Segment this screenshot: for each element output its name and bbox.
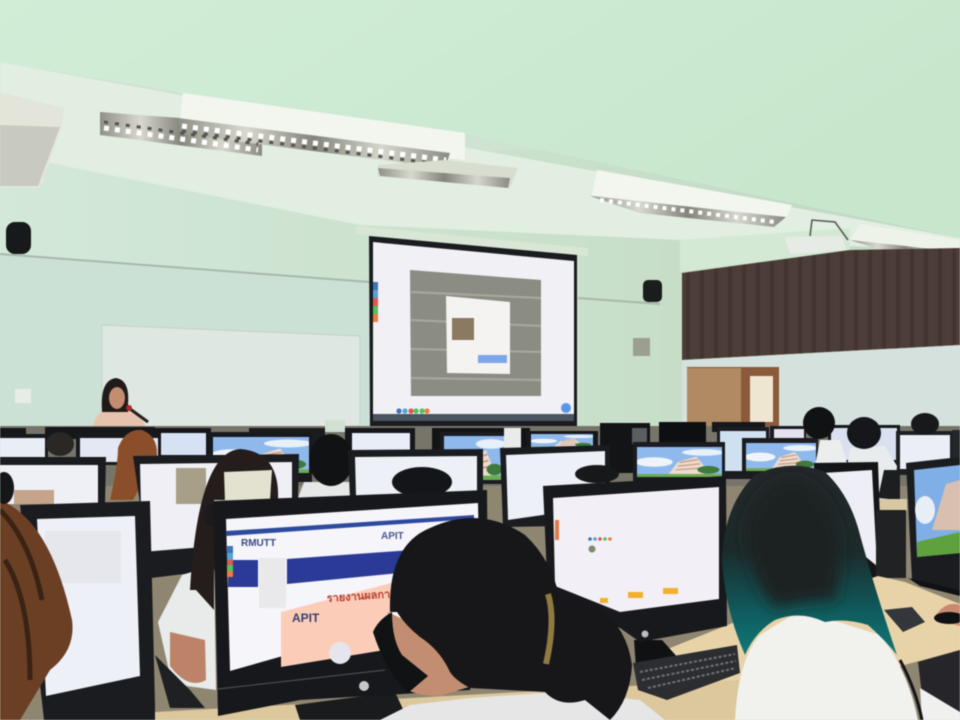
hand with mouse — [934, 604, 960, 626]
screen housing — [356, 226, 588, 256]
colour dots row — [588, 537, 612, 541]
projection screen — [369, 236, 577, 429]
middle row monitor right — [500, 445, 610, 527]
desk lower centre — [155, 680, 740, 720]
share icons — [555, 520, 559, 540]
peach poster — [281, 582, 395, 667]
desktop tower dark block — [876, 510, 906, 578]
dark under desk right — [918, 650, 960, 720]
HP badge — [642, 630, 648, 638]
floor and desk base behind front row — [0, 486, 960, 720]
whiteboard — [102, 325, 360, 431]
wall rail — [0, 254, 660, 304]
speaker left — [6, 222, 31, 254]
dialog — [446, 296, 510, 374]
chair dark — [878, 470, 900, 500]
orange buttons — [600, 588, 678, 603]
bare wall gaps above monitors — [325, 420, 345, 432]
student: right girl shirt — [735, 610, 918, 720]
back row monitors — [0, 422, 960, 484]
brown curtain panel — [682, 248, 960, 360]
head right of centre — [575, 465, 619, 483]
head of far left student — [0, 472, 14, 504]
right upper wall — [680, 228, 850, 272]
HP badge — [359, 681, 369, 691]
ceiling light right — [850, 224, 960, 262]
book thumbnail — [452, 318, 474, 340]
far right monitor — [906, 457, 960, 590]
student: right girl hair — [722, 466, 897, 655]
poster APIT text: APIT — [292, 611, 320, 625]
dialog button — [478, 355, 507, 363]
desk right — [640, 576, 960, 720]
middle row monitor with book viewer — [133, 454, 299, 578]
blue banner — [287, 548, 440, 584]
avatar — [588, 546, 596, 552]
front monitor with APIT page — [213, 490, 488, 716]
student: centre back — [298, 434, 353, 498]
wall box — [633, 338, 650, 356]
wooden door — [687, 367, 779, 428]
share icons — [227, 546, 233, 577]
student: right back B — [846, 417, 897, 500]
paper held up — [224, 470, 272, 502]
right lower wall — [682, 345, 960, 440]
right side monitor — [814, 462, 882, 586]
social icons on screen — [373, 282, 378, 322]
student: right back C — [911, 413, 939, 435]
hair clip — [546, 594, 552, 664]
keyboard small right — [884, 607, 925, 632]
projector — [785, 220, 848, 254]
ceiling underside — [0, 62, 960, 250]
student: centre girl mask — [373, 612, 428, 693]
book shelves — [411, 292, 541, 380]
wall socket panel — [15, 389, 31, 403]
student: left middle girl — [158, 449, 278, 690]
student: centre girl shirt — [380, 692, 665, 720]
ceiling light left — [100, 93, 518, 188]
back row base shadow — [0, 426, 960, 486]
student: right back A — [803, 407, 848, 466]
student: bottom left hair — [0, 500, 73, 720]
monitor stand far right — [908, 578, 960, 596]
ceiling beam — [0, 0, 960, 238]
front monitor right — [543, 476, 727, 642]
head: back row auburn hair — [110, 430, 157, 500]
monitor stand centre-left — [295, 692, 408, 720]
presenter — [92, 378, 148, 428]
blue side block — [228, 560, 258, 587]
desk strip right back — [877, 499, 907, 511]
left air conditioner — [0, 92, 64, 188]
bag strap — [900, 660, 922, 720]
student: centre girl hair — [390, 518, 632, 720]
monitor chin line — [218, 670, 385, 689]
front monitor left — [20, 501, 155, 720]
white shirt bottom right — [920, 688, 960, 720]
back wall — [0, 150, 960, 590]
APIT logo text: APIT — [381, 531, 404, 542]
dropdown menu — [259, 558, 286, 608]
poster portrait — [329, 642, 351, 664]
chair left — [155, 655, 205, 708]
RMUTT logo text: RMUTT — [241, 538, 276, 549]
ceiling light centre — [590, 170, 792, 227]
page header bar — [226, 515, 474, 536]
middle row monitor centre — [348, 449, 483, 500]
share row — [396, 408, 430, 414]
student: centre girl face — [388, 612, 472, 696]
speaker right — [643, 280, 662, 302]
middle row monitor far left — [0, 457, 106, 504]
projected book viewer — [410, 270, 541, 396]
head: back row small — [46, 432, 74, 456]
head behind centre monitor — [392, 467, 452, 497]
keyboard centre — [633, 645, 740, 700]
poster headline: รายงานผลการ — [326, 588, 397, 605]
help bubble — [561, 403, 571, 413]
lower left wall tone — [0, 254, 370, 435]
monitor stand front centre — [634, 640, 680, 668]
